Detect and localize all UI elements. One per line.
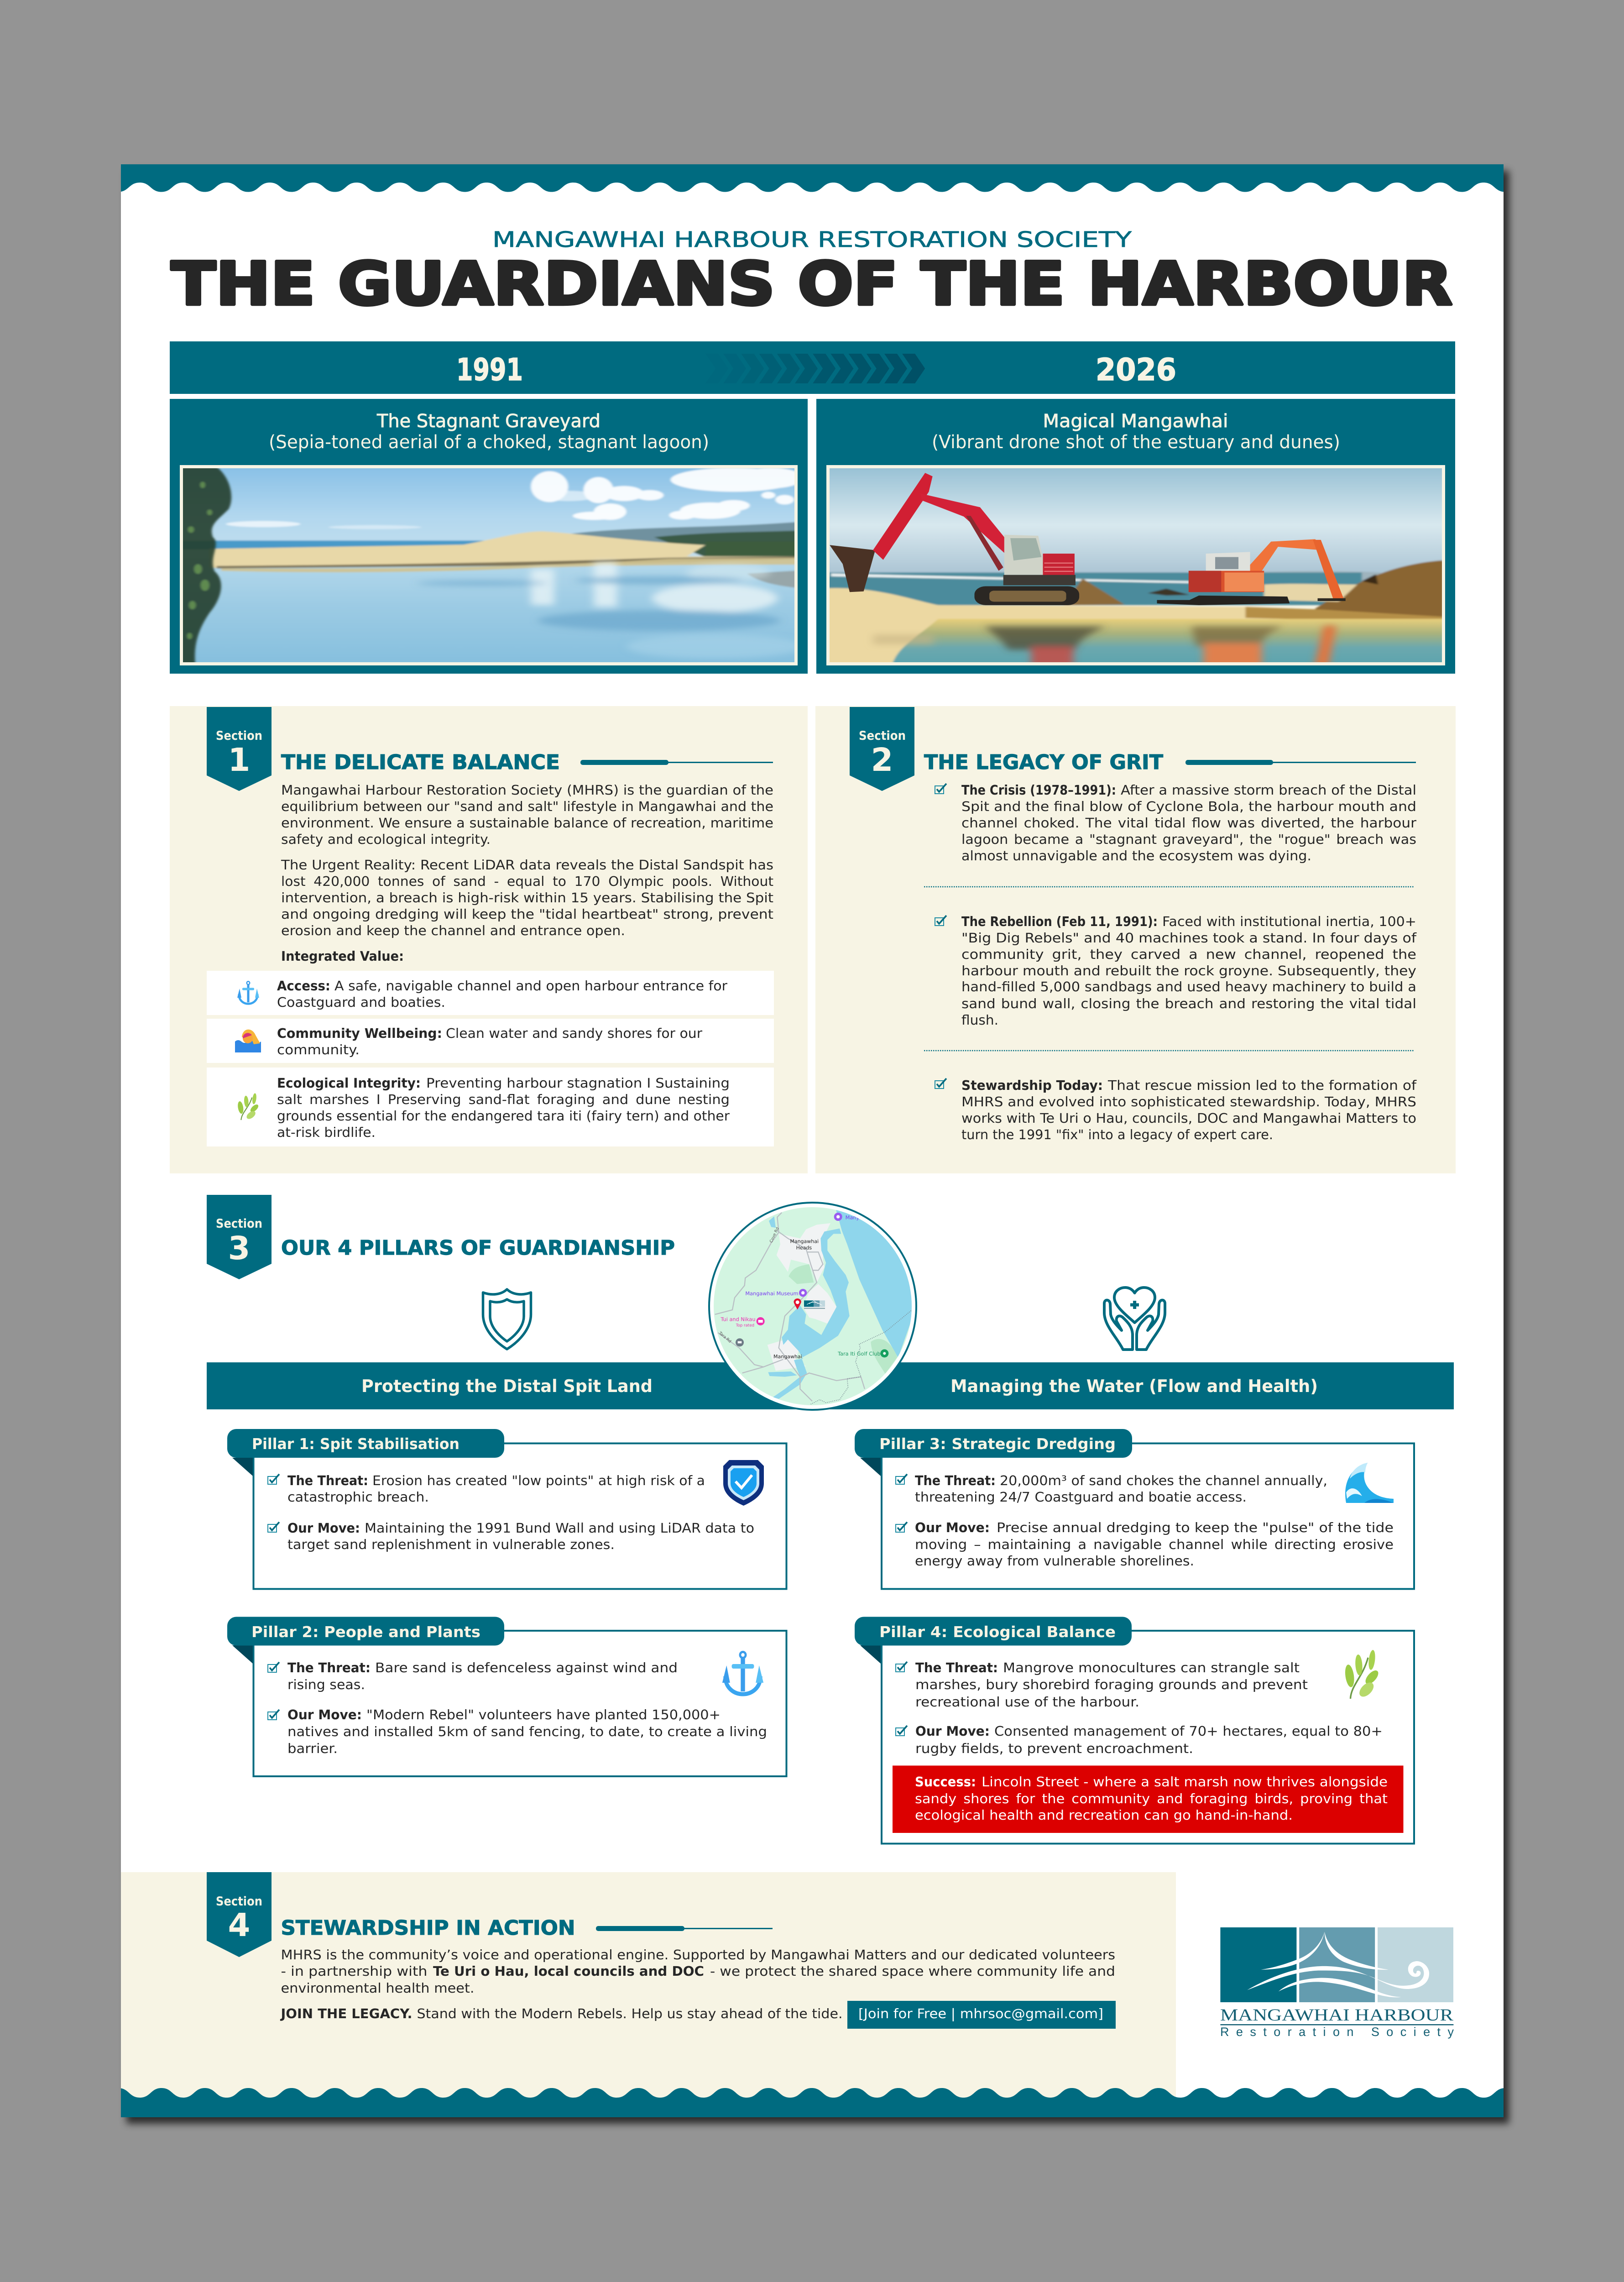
year 2026: 2026 [1096,352,1176,387]
icon: wave [1345,1463,1394,1503]
threat text [268,1660,678,1692]
section 3 ribbon: 3 [228,1230,250,1267]
section 1 panel: the delicate balance [170,706,808,1173]
move text: Maintaining the 1991 Bund Wall and using LiDAR data to [365,1520,754,1536]
threat text: The Threat: [287,1473,368,1488]
wellbeing text [277,1026,702,1057]
move text [268,1707,767,1756]
timeline item: the rebellion: sand bund wall, closing the breach and restoring the vital tidal [961,996,1416,1011]
move text: target sand replenishment in vulnerable zones. [287,1537,615,1552]
timeline item: stewardship today: Stewardship Today: [961,1078,1103,1093]
intro paragraph: equilibrium between our "sand and salt" lifestyle in Mangawhai and the [281,799,773,814]
pillar 2 tab: Pillar 2: People and Plants [251,1623,480,1641]
timeline item: the crisis [935,782,1416,864]
section 1 ribbon: Section [216,729,262,743]
icon: anchor [722,1652,763,1694]
timeline bar [170,341,1455,394]
threat text: Erosion has created "low points" at high risk of a [372,1473,705,1488]
timeline item: the rebellion: hand-filled 5,000 sandbags and used heavy machinery to build a [961,979,1416,994]
threat text: The Threat: [915,1660,998,1675]
section 3 heading: OUR 4 PILLARS OF GUARDIANSHIP [281,1236,675,1260]
section 1 ribbon [207,707,272,791]
timeline item: the crisis: lagoon became a "stagnant graveyard", the "rogue" breach was [961,832,1416,847]
threat text: 20,000m³ of sand chokes the channel annually, [1000,1473,1327,1488]
pillar 3 tab: Pillar 3: Strategic Dredging [879,1435,1116,1453]
move text: barrier. [287,1741,338,1756]
panel caption: (Vibrant drone shot of the estuary and dunes) [932,432,1340,453]
tab fold [232,1645,253,1664]
section 2 panel: the legacy of grit [815,706,1456,1173]
map image: Tara Rd [718,1331,732,1344]
section 4 ribbon [207,1872,272,1957]
timeline item: the crisis: almost unnavigable and the ecosystem was dying. [961,848,1311,864]
pillar 2 tab [227,1617,504,1646]
threat text: recreational use of the harbour. [915,1694,1139,1710]
map image: Tui and Nikau [721,1316,756,1323]
tab fold [232,1458,253,1476]
map image [709,1202,922,1415]
intro paragraph: Mangawhai Harbour Restoration Society (MHRS) is the guardian of the [281,782,773,798]
section 1 heading: THE DELICATE BALANCE [281,751,560,774]
value row: community wellbeing [207,1019,774,1063]
photo: excavators on the sand [817,463,1455,667]
map image: Mangawhai [773,1354,802,1360]
move text: natives and installed 5km of sand fencing, to date, to create a living [287,1724,767,1739]
map roundel [709,1202,922,1415]
tab fold [860,1645,881,1664]
urgent reality paragraph: lost 420,000 tonnes of sand - equal to 170 Olympic pools. Without [281,874,773,889]
map image: Many [846,1214,859,1220]
pillar 4 card [855,1617,1414,1844]
success callout [893,1765,1404,1833]
icon: blue shield [723,1460,764,1506]
stewardship paragraph: Te Uri o Hau, local councils and DOC [433,1963,704,1979]
move text: energy away from vulnerable shorelines. [915,1553,1194,1569]
call to action button: [Join for Free | mhrsoc@gmail.com] [858,2006,1103,2021]
banner left label: Protecting the Distal Spit Land [361,1376,653,1396]
value row: ecological integrity [207,1068,774,1146]
section 3 ribbon: Section [216,1217,262,1231]
timeline item: the crisis: After a massive storm breach of the Distal [1121,782,1416,798]
urgent reality paragraph: intervention, a breach is high-risk within 15 years. Stabilising the Spit [281,890,773,905]
panel: magical mangawhai [816,399,1455,674]
icon: sprig [1344,1649,1380,1700]
move text: Consented management of 70+ hectares, equal to 80+ [994,1723,1383,1739]
bottom wave border [118,2088,1624,2117]
urgent reality paragraph [281,857,773,938]
move text [268,1520,754,1552]
urgent reality paragraph: erosion and keep the channel and entrance open. [281,923,625,938]
section 1 ribbon: 1 [228,741,250,779]
threat text: rising seas. [287,1677,365,1692]
access text: Coastguard and boaties. [277,994,445,1010]
integrated value label: Integrated Value: [281,948,404,964]
banner: pillars heading bar [207,1362,1454,1409]
access text: A safe, navigable channel and open harbour entrance for [334,978,727,994]
move text [896,1520,1394,1569]
chevron arrow [705,354,925,383]
ecological text: grounds essential for the endangered tara iti (fairy tern) and other [277,1108,730,1124]
pillar 4 tab [855,1617,1132,1646]
intro paragraph [281,782,773,847]
timeline item: stewardship today [935,1078,1417,1142]
map image: Cove Rd [769,1226,780,1243]
section 3 ribbon [207,1195,272,1279]
top wave border [96,164,1624,192]
pillar 1 card [227,1429,787,1589]
organisation subtitle: MANGAWHAI HARBOUR RESTORATION SOCIETY [492,227,1132,252]
move text [896,1723,1383,1756]
timeline item: stewardship today: MHRS and evolved into sophisticated stewardship. Today, MHRS [961,1094,1416,1110]
threat text: The Threat: [287,1660,371,1675]
stewardship paragraph: MHRS is the community’s voice and operational engine. Supported by Mangawhai Matters and our dedicated volunteers [281,1947,1115,1963]
threat text [896,1473,1327,1505]
pillar 4 tab: Pillar 4: Ecological Balance [879,1623,1116,1641]
map image: Top rated [736,1323,754,1328]
icon: shield outline [483,1289,531,1349]
panel caption: (Sepia-toned aerial of a choked, stagnant lagoon) [269,432,709,453]
threat text: catastrophic breach. [287,1489,429,1505]
wellbeing text: Clean water and sandy shores for our [446,1026,702,1041]
photo frame [826,465,1445,665]
stewardship paragraph: environmental health meet. [281,1980,475,1996]
timeline item: the rebellion: The Rebellion (Feb 11, 1991): [961,914,1158,929]
move text: Precise annual dredging to keep the "pulse" of the tide [997,1520,1394,1535]
wellbeing text: Community Wellbeing: [277,1026,442,1041]
stewardship paragraph [281,1947,1115,1996]
threat text: marshes, bury shorebird foraging grounds and prevent [915,1677,1308,1692]
section 4 ribbon: 4 [228,1906,250,1944]
timeline item: the rebellion: flush. [961,1012,998,1028]
photo: lagoon and dunes [170,463,808,667]
tab fold [860,1458,881,1476]
pillar 1 tab: Pillar 1: Spit Stabilisation [252,1435,460,1453]
section 4 ribbon: Section [216,1895,262,1909]
dotted divider [924,1050,1415,1051]
timeline item: the rebellion: community grit, they carved a new channel, reopened the [961,947,1416,962]
ecological text: salt marshes I Preserving sand-flat foraging and dune nesting [277,1092,730,1107]
intro paragraph: environment. We ensure a sustainable balance of recreation, maritime [281,815,773,831]
timeline item: the crisis: The Crisis (1978–1991): [961,782,1116,798]
timeline item: the crisis: channel choked. The vital tidal flow was diverted, the harbour [961,815,1416,831]
move text: moving – maintaining a navigable channel while directing erosive [915,1537,1394,1552]
ecological text [277,1075,730,1140]
pillar 2 card [227,1617,787,1776]
panel heading: The Stagnant Graveyard [376,411,601,432]
timeline item: stewardship today: turn the 1991 "fix" into a legacy of expert care. [961,1127,1273,1142]
section 4 panel: stewardship in action [121,1872,1176,2100]
map image: Mangawhai Museum [745,1291,799,1297]
ecological text: Ecological Integrity: [277,1075,421,1091]
success callout: sandy shores for the community and foraging birds, proving that [915,1791,1388,1806]
logo: mangawhai harbour restoration society [1220,1927,1454,2039]
section 2 ribbon: 2 [871,741,893,779]
logo: mangawhai harbour restoration society: Restoration Society [1220,2025,1454,2039]
timeline item: the rebellion [935,914,1417,1028]
timeline item: the crisis: Spit and the final blow of Cyclone Bola, the harbour mouth and [961,799,1416,814]
pillar 3 card [855,1429,1414,1589]
success callout: ecological health and recreation can go hand-in-hand. [915,1807,1293,1823]
section 2 heading: THE LEGACY OF GRIT [924,751,1163,774]
dotted divider [924,886,1415,887]
heading rule [1185,760,1416,765]
icon: swimmer [235,1030,261,1052]
call to action button [847,2001,1116,2029]
timeline item: stewardship today: works with Te Uri o Hau, councils, DOC and Mangawhai Matters to [961,1110,1416,1126]
timeline item: stewardship today: That rescue mission led to the formation of [1107,1078,1417,1093]
white page [121,164,1504,2117]
value row: access [207,971,774,1015]
move text: "Modern Rebel" volunteers have planted 150,000+ [366,1707,721,1722]
pillar 3 tab [855,1429,1132,1458]
ecological text: Preventing harbour stagnation I Sustaining [426,1075,730,1091]
timeline item: the rebellion: Faced with institutional inertia, 100+ [1162,914,1416,929]
threat text: The Threat: [915,1473,996,1488]
call to action text: Stand with the Modern Rebels. Help us stay ahead of the tide. [417,2006,842,2021]
section 2 ribbon: Section [859,729,906,743]
icon: sprig [237,1093,260,1120]
call to action text: JOIN THE LEGACY. [280,2006,413,2021]
logo: mangawhai harbour restoration society: MANGAWHAI HARBOUR [1220,2006,1453,2025]
pillar 1 tab [227,1429,504,1458]
banner right label: Managing the Water (Flow and Health) [950,1376,1318,1396]
panel: the stagnant graveyard [170,399,808,674]
stewardship paragraph: - we protect the shared space where community life and [710,1963,1115,1979]
move text: rugby fields, to prevent encroachment. [915,1741,1193,1756]
icon: anchor [237,981,259,1004]
timeline item: the rebellion: harbour mouth and rebuilt the rock groyne. Subsequently, they [961,963,1416,979]
main title: THE GUARDIANS OF THE HARBOUR [171,249,1452,319]
intro paragraph: safety and ecological integrity. [281,832,491,847]
map image: Heads [796,1245,812,1251]
success callout: Success: [915,1774,976,1790]
threat text [896,1660,1308,1710]
map image: Tara Iti Golf Club [838,1351,881,1357]
photo frame [180,465,798,665]
heading rule [580,760,773,765]
move text: Our Move: [287,1707,362,1722]
urgent reality paragraph: and ongoing dredging will keep the "tidal heartbeat" strong, prevent [281,906,773,922]
move text: Our Move: [287,1520,360,1536]
access text [277,978,727,1010]
threat text: Bare sand is defenceless against wind and [375,1660,678,1675]
poster canvas [121,164,1514,2129]
section 4 heading: STEWARDSHIP IN ACTION [281,1916,575,1940]
heading rule [596,1926,773,1931]
ecological text: at-risk birdlife. [277,1125,376,1140]
year 1991: 1991 [456,352,523,387]
threat text [268,1473,705,1505]
stewardship paragraph: - in partnership with [281,1963,427,1979]
move text: Our Move: [915,1520,990,1535]
urgent reality paragraph: The Urgent Reality: Recent LiDAR data reveals the Distal Sandspit has [281,857,773,873]
page shadow [126,171,1509,2124]
wellbeing text: community. [277,1042,360,1057]
move text: Our Move: [915,1723,990,1739]
icon: hands holding heart [1104,1288,1165,1350]
success callout: Lincoln Street - where a salt marsh now thrives alongside [982,1774,1388,1790]
panel heading: Magical Mangawhai [1043,411,1228,432]
threat text: threatening 24/7 Coastguard and boatie access. [915,1489,1247,1505]
threat text: Mangrove monocultures can strangle salt [1003,1660,1300,1675]
access text: Access: [277,978,330,994]
map image: Mangawhai [790,1238,819,1244]
timeline item: the rebellion: "Big Dig Rebels" and 40 machines took a stand. In four days of [961,930,1417,946]
section 2 ribbon [850,707,914,791]
